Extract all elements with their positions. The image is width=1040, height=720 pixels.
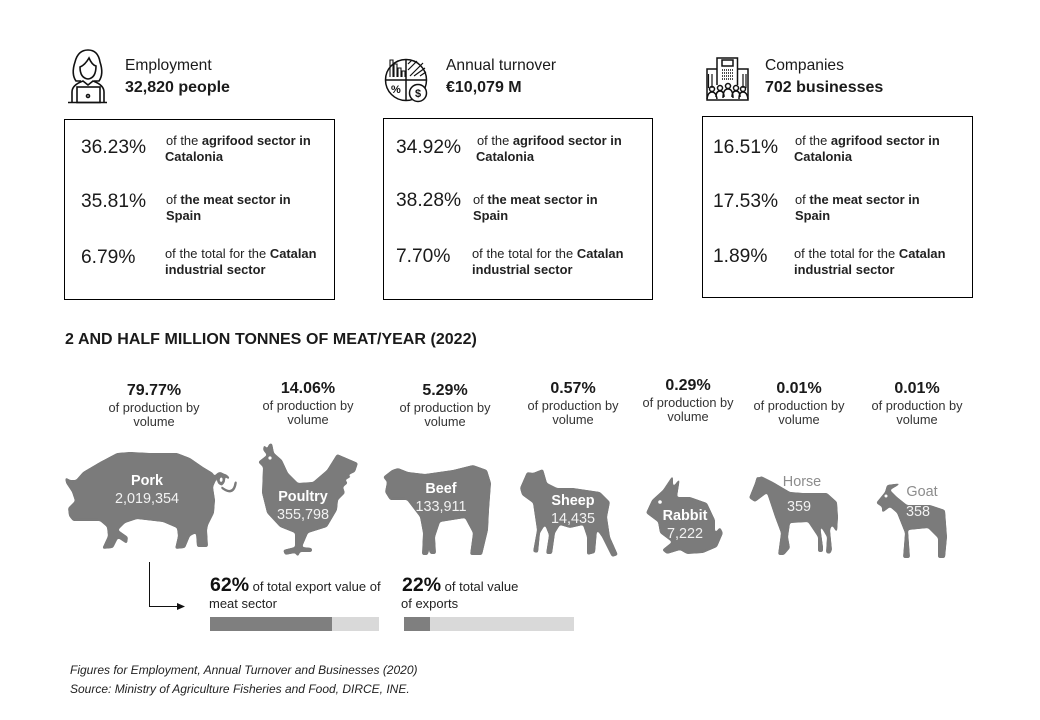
production share: rabbit: of production by bbox=[642, 395, 734, 410]
callout: 22% of exports: 22% of total value bbox=[402, 574, 518, 596]
stat: industry share: 1.89% bbox=[713, 246, 767, 267]
description: industry share: industrial sector bbox=[472, 262, 572, 277]
description: agrifood share: Catalonia bbox=[165, 149, 223, 164]
production share: goat: volume bbox=[896, 412, 938, 427]
production share: poultry: 14.06% bbox=[281, 380, 335, 397]
production share: horse: of production by bbox=[753, 398, 845, 413]
heading: companies: 702 businesses bbox=[765, 79, 883, 96]
heading: annual turnover: Annual turnover bbox=[446, 57, 556, 74]
stat: industry share: 7.70% bbox=[396, 246, 450, 267]
description: industry share: industrial sector bbox=[794, 262, 894, 277]
callout: 62% of export value bbox=[209, 574, 381, 611]
label: sheep: 14,435 bbox=[551, 511, 595, 527]
description: agrifood share: Catalonia bbox=[794, 149, 852, 164]
description: meat share: of the meat sector in bbox=[166, 192, 291, 207]
footnote: Source: Ministry of Agriculture Fisheries and Food, DIRCE, INE. bbox=[70, 682, 410, 696]
production share: goat bbox=[871, 380, 963, 427]
label: sheep bbox=[551, 493, 595, 527]
heading: employment: 32,820 people bbox=[125, 79, 230, 96]
heading: companies: Companies bbox=[765, 57, 844, 74]
stat: meat share: 38.28% bbox=[396, 190, 461, 211]
production share: horse: 0.01% bbox=[776, 380, 822, 397]
description: meat share bbox=[473, 192, 598, 223]
description: meat share bbox=[795, 192, 920, 223]
description: agrifood share bbox=[165, 133, 311, 164]
heading: annual turnover bbox=[446, 57, 556, 96]
callout: 62% of export value: meat sector bbox=[209, 596, 277, 611]
description: industry share bbox=[165, 246, 316, 277]
label: beef: 133,911 bbox=[416, 499, 466, 515]
production share: poultry: of production by bbox=[262, 398, 354, 413]
bar: 62% bbox=[210, 617, 379, 631]
label: beef: Beef bbox=[425, 481, 457, 497]
label: rabbit bbox=[663, 508, 708, 542]
description: industry share: of the total for the Catalan bbox=[472, 246, 623, 261]
label: horse name: Horse bbox=[783, 474, 821, 490]
description: industry share: of the total for the Catalan bbox=[794, 246, 945, 261]
production share: pork: volume bbox=[133, 414, 175, 429]
label: poultry: 355,798 bbox=[277, 507, 329, 523]
description: industry share bbox=[794, 246, 945, 277]
description: agrifood share: of the agrifood sector in bbox=[795, 133, 940, 148]
heading: employment bbox=[125, 57, 230, 96]
production share: sheep: 0.57% bbox=[550, 380, 596, 397]
section heading: 2 AND HALF MILLION TONNES OF MEAT/YEAR (2022) bbox=[65, 331, 477, 348]
stat: agrifood share: 16.51% bbox=[713, 137, 778, 158]
production share: pork: 79.77% bbox=[127, 382, 181, 399]
production share: beef: 5.29% bbox=[422, 382, 468, 399]
label: beef bbox=[416, 481, 466, 515]
stat: industry share: 6.79% bbox=[81, 247, 135, 268]
stat: meat share: 35.81% bbox=[81, 191, 146, 212]
production share: rabbit bbox=[642, 377, 734, 424]
callout: 22% of exports: of exports bbox=[401, 596, 458, 611]
description: meat share: of the meat sector in bbox=[473, 192, 598, 207]
footnote: Figures for Employment, Annual Turnover and Businesses (2020) bbox=[70, 663, 418, 677]
heading: annual turnover: €10,079 M bbox=[446, 79, 522, 96]
production share: beef bbox=[399, 382, 491, 429]
description: industry share: of the total for the Catalan bbox=[165, 246, 316, 261]
callout: 22% of exports bbox=[401, 574, 518, 611]
panel: employment shares bbox=[64, 119, 335, 300]
production share: goat: of production by bbox=[871, 398, 963, 413]
label: rabbit: 7,222 bbox=[667, 526, 703, 542]
footnote bbox=[70, 663, 418, 696]
label: goat name: Goat bbox=[906, 484, 938, 500]
production share: rabbit: volume bbox=[667, 409, 709, 424]
panel: companies shares bbox=[702, 116, 973, 298]
production share: pork bbox=[108, 382, 200, 429]
production share: horse: volume bbox=[778, 412, 820, 427]
label: poultry bbox=[277, 489, 329, 523]
production share: goat: 0.01% bbox=[894, 380, 940, 397]
description: agrifood share bbox=[476, 133, 622, 164]
production share: beef: volume bbox=[424, 414, 466, 429]
description: meat share: Spain bbox=[795, 208, 830, 223]
description: industry share: industrial sector bbox=[165, 262, 266, 277]
production share: poultry: volume bbox=[287, 412, 329, 427]
callout: 62% of export value: 62% of total export value of bbox=[210, 574, 381, 596]
description: meat share: Spain bbox=[166, 208, 201, 223]
label: goat value: 358 bbox=[906, 504, 930, 520]
label: horse value: 359 bbox=[787, 499, 811, 515]
stat: agrifood share: 34.92% bbox=[396, 137, 461, 158]
description: agrifood share bbox=[794, 133, 940, 164]
panel: turnover shares bbox=[383, 118, 653, 300]
stat: agrifood share: 36.23% bbox=[81, 137, 146, 158]
description: agrifood share: Catalonia bbox=[476, 149, 534, 164]
description: meat share: Spain bbox=[473, 208, 508, 223]
heading: companies bbox=[765, 57, 883, 96]
label: pork: 2,019,354 bbox=[115, 491, 179, 507]
production share: horse bbox=[753, 380, 845, 427]
bar: 22% bbox=[404, 617, 574, 631]
description: meat share: of the meat sector in bbox=[795, 192, 920, 207]
label: pork: Pork bbox=[131, 473, 163, 489]
label: pork bbox=[115, 473, 179, 507]
label: poultry: Poultry bbox=[278, 489, 328, 505]
heading: employment: Employment bbox=[125, 57, 212, 74]
icon: turnover pie chart: $ bbox=[415, 88, 421, 100]
description: agrifood share: of the agrifood sector in bbox=[477, 133, 622, 148]
production share: sheep: of production by bbox=[527, 398, 619, 413]
production share: poultry bbox=[262, 380, 354, 427]
label: sheep: Sheep bbox=[551, 493, 595, 509]
production share: beef: of production by bbox=[399, 400, 491, 415]
production share: rabbit: 0.29% bbox=[665, 377, 711, 394]
icon: turnover pie chart: % bbox=[391, 84, 401, 96]
production share: pork: of production by bbox=[108, 400, 200, 415]
production share: sheep: volume bbox=[552, 412, 594, 427]
description: industry share bbox=[472, 246, 623, 277]
label: rabbit: Rabbit bbox=[663, 508, 707, 524]
description: meat share bbox=[166, 192, 291, 223]
stat: meat share: 17.53% bbox=[713, 191, 778, 212]
description: agrifood share: of the agrifood sector in bbox=[166, 133, 311, 148]
production share: sheep bbox=[527, 380, 619, 427]
